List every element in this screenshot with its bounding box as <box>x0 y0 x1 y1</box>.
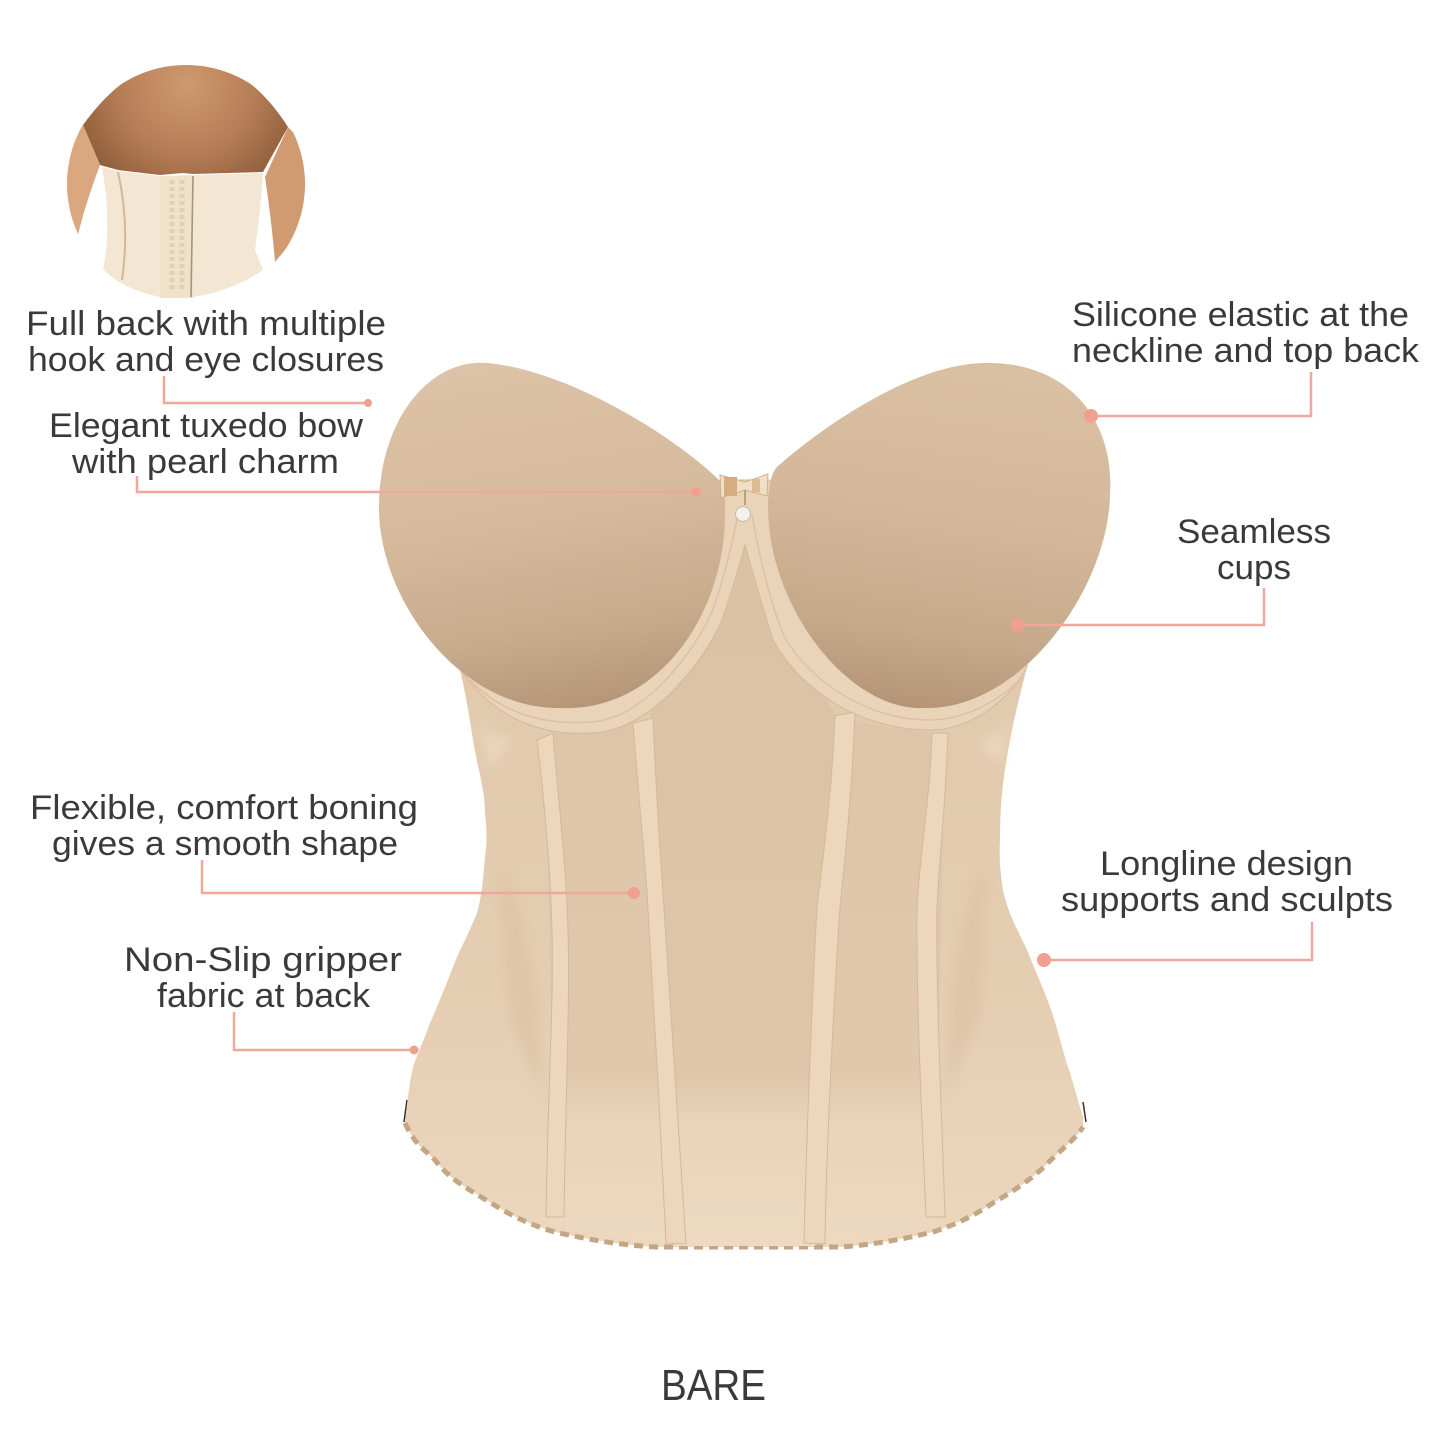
body <box>405 667 1083 1247</box>
back view photo circle <box>60 60 310 298</box>
label: non-slip: fabric at back <box>157 977 371 1015</box>
icon: tuxedo bow with pearl <box>720 474 768 522</box>
label: non-slip: Non-Slip gripper <box>124 941 402 979</box>
label: non-slip <box>124 941 418 1054</box>
label: longline design: supports and sculpts <box>1061 881 1393 919</box>
label: full back: hook and eye closures <box>28 341 384 379</box>
highlights under band <box>478 720 515 770</box>
label: tuxedo bow: with pearl charm <box>71 443 339 481</box>
label: longline design <box>1037 845 1393 967</box>
label: seamless cups: cups <box>1217 549 1291 587</box>
label: silicone elastic: neckline and top back <box>1072 332 1420 370</box>
label: silicone elastic: Silicone elastic at the <box>1072 296 1409 334</box>
label: tuxedo bow <box>49 407 701 497</box>
back closure garment <box>102 167 263 297</box>
label: seamless cups <box>1011 513 1331 632</box>
right arm <box>265 127 305 262</box>
left cup <box>379 363 725 708</box>
boning channels <box>537 733 569 1217</box>
band seam <box>470 515 1022 723</box>
garment <box>379 363 1110 1247</box>
back edge slivers <box>404 1100 1086 1122</box>
label: seamless cups: Seamless <box>1177 513 1331 551</box>
label: boning: Flexible, comfort boning <box>30 789 418 827</box>
scalloped hem lace <box>405 1123 1083 1247</box>
label: tuxedo bow: Elegant tuxedo bow <box>49 407 363 445</box>
label: full back: Full back with multiple <box>26 305 386 343</box>
left arm <box>67 125 100 234</box>
colour name: BARE <box>661 1361 766 1410</box>
underwire band and gore <box>460 480 1027 733</box>
label: full back <box>26 305 386 407</box>
label: boning: gives a smooth shape <box>52 825 398 863</box>
label: longline design: Longline design <box>1100 845 1353 883</box>
back skin <box>83 60 288 175</box>
label: boning <box>30 789 640 899</box>
side panels <box>545 720 676 1245</box>
centre panel <box>650 540 835 1246</box>
side fold shadows <box>500 860 545 1100</box>
right cup <box>768 363 1110 708</box>
label: silicone elastic <box>1072 296 1420 423</box>
